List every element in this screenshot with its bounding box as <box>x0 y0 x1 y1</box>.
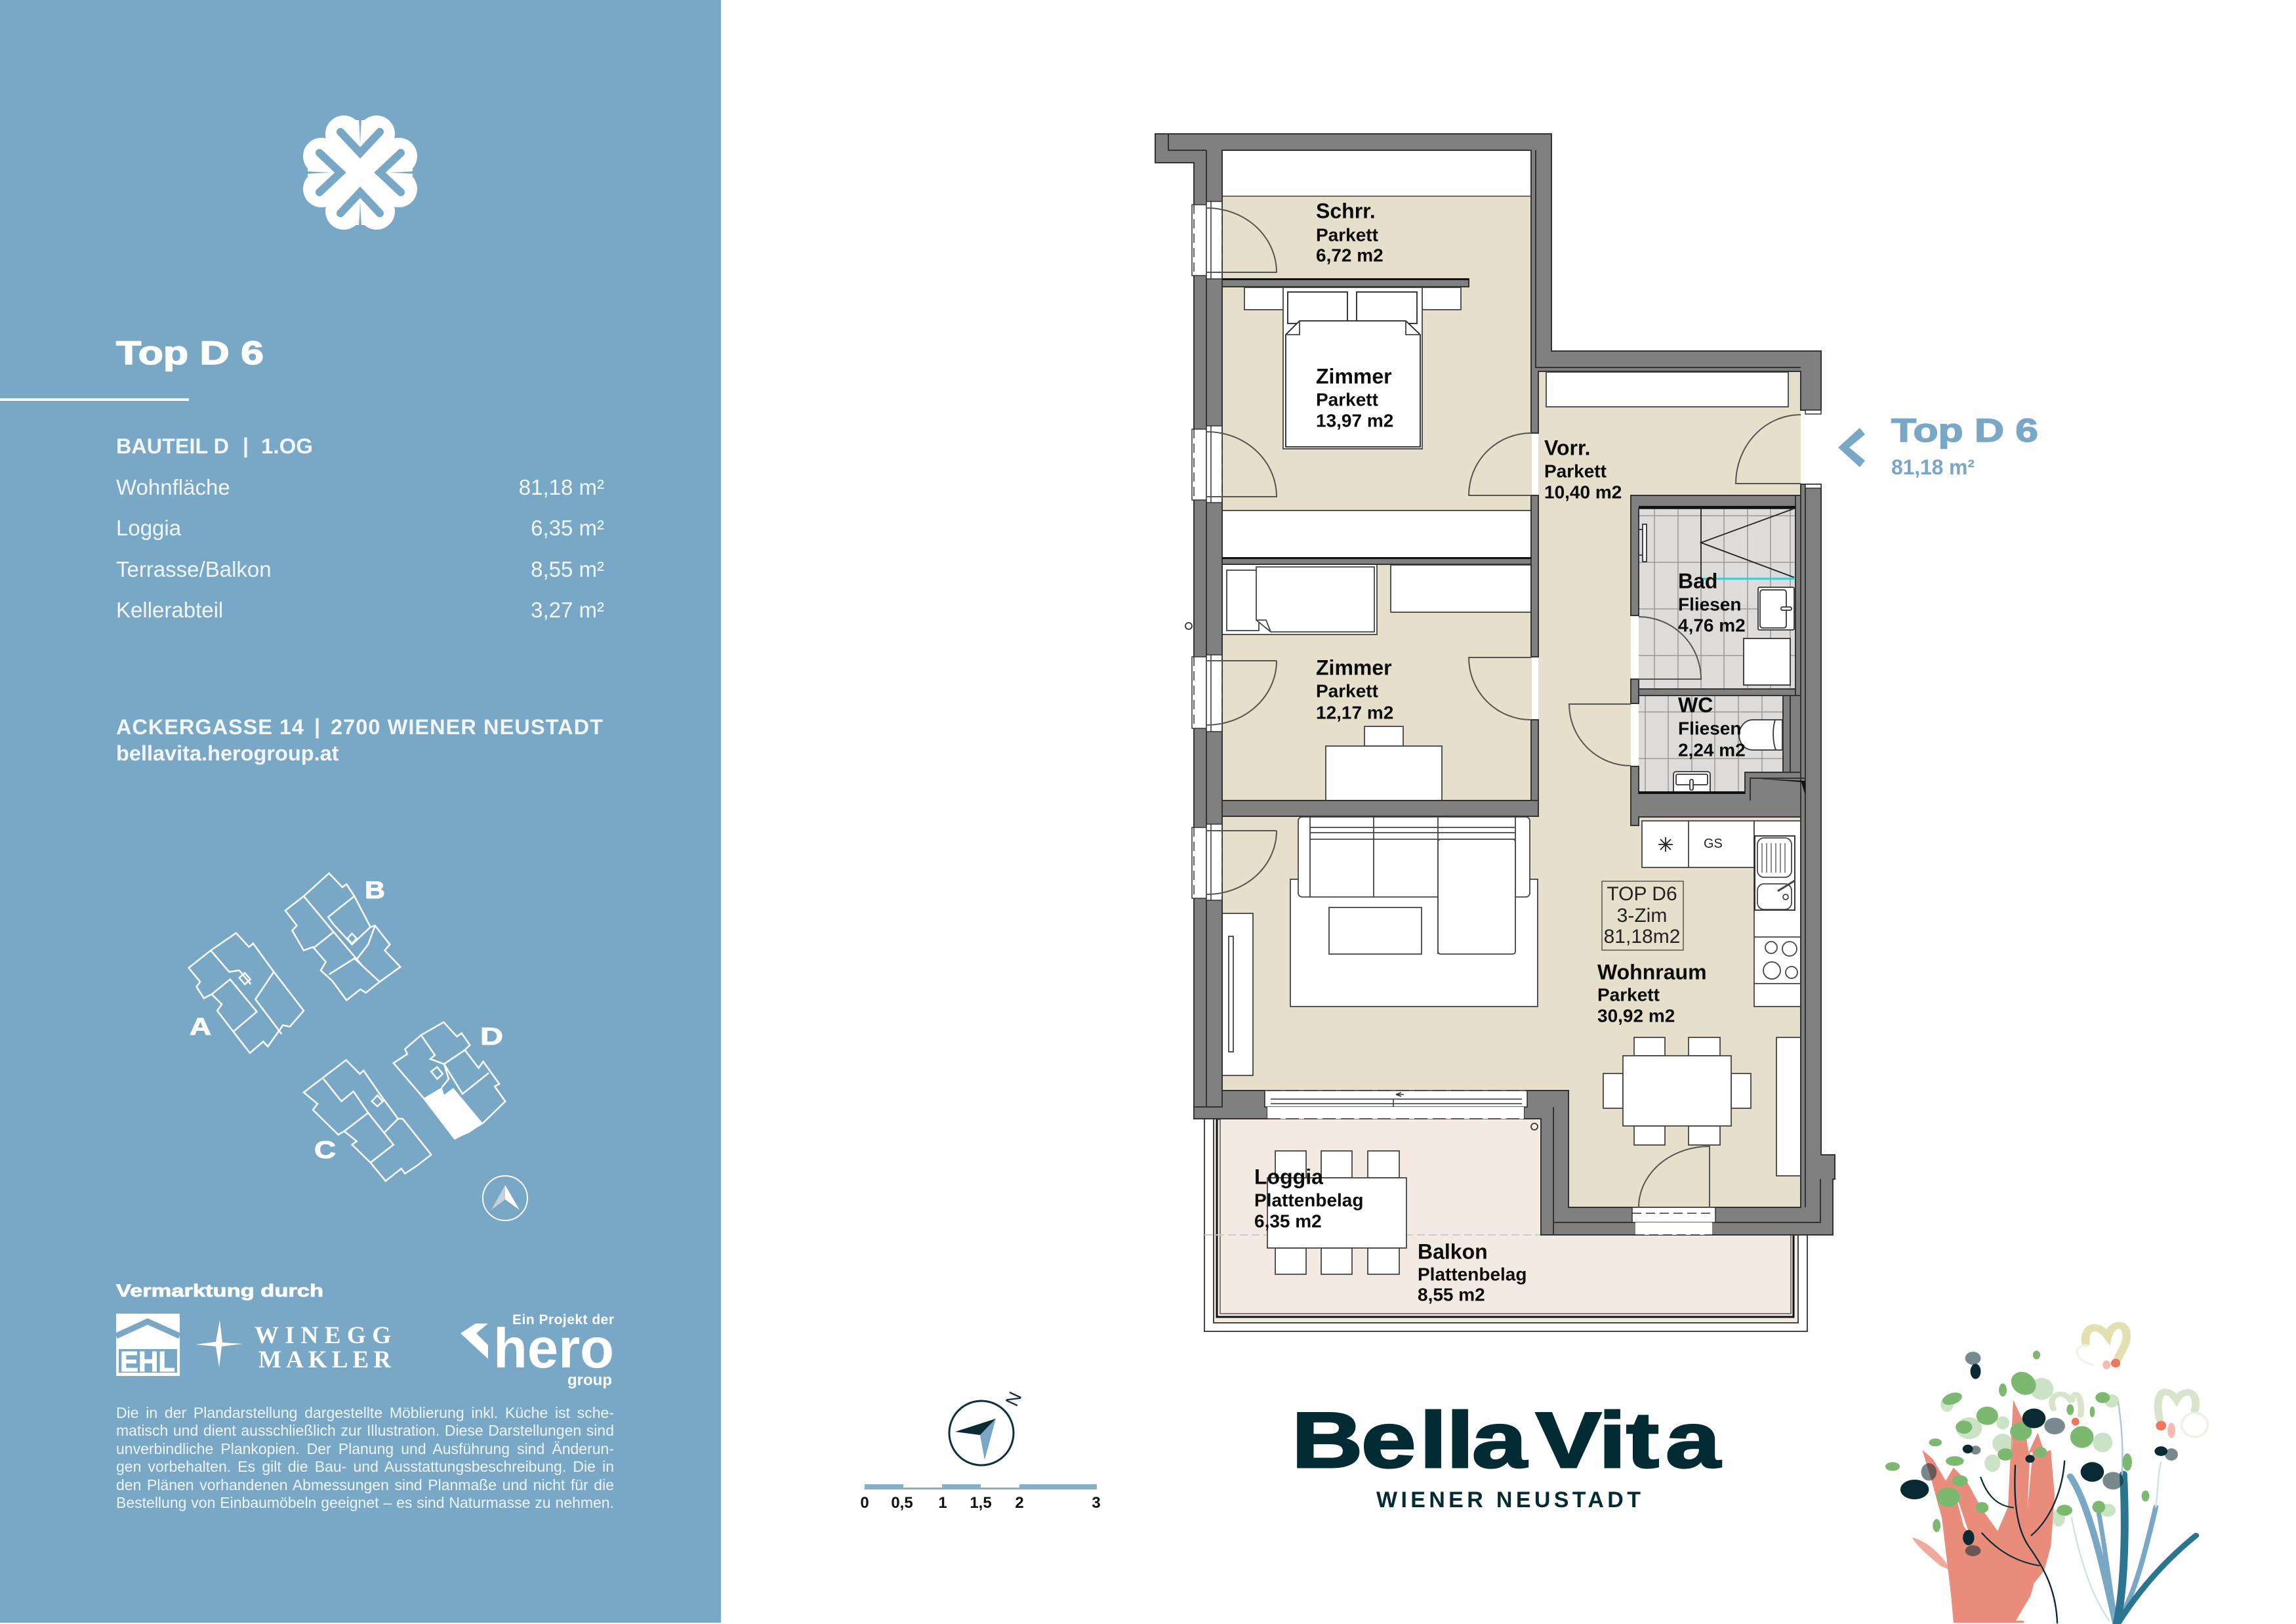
room labels: Balkon <box>1418 1240 1488 1264</box>
room labels: 8,55 m2 <box>1418 1285 1485 1304</box>
windows and doors in walls <box>1192 201 1821 1235</box>
text block: disclaimer: Die in der Plandarstellung dargestellte Möblierung inkl. Küche ist sche- <box>116 1404 614 1421</box>
room labels: 2,24 m2 <box>1678 740 1746 760</box>
room labels: Parkett <box>1316 681 1378 701</box>
icon: hood asterisk <box>1658 837 1673 852</box>
text: Wiener Neustadt: WIENER NEUSTADT <box>1376 1488 1641 1512</box>
building letters: D <box>480 1023 503 1050</box>
room labels: 6,35 m2 <box>1254 1211 1322 1231</box>
furniture: living room and kitchen <box>1222 817 1801 1274</box>
icon: site compass <box>483 1176 527 1220</box>
logo: Winegg Makler: MAKLER <box>258 1346 392 1373</box>
label: GS: GS <box>1704 837 1723 851</box>
text block: area table: | <box>243 434 249 457</box>
text block: disclaimer: unverbindliche Plankopien. Der Planung und Ausführung sind Änderun- <box>116 1440 614 1457</box>
text block: address <box>116 715 603 765</box>
room labels: Loggia <box>1254 1165 1323 1189</box>
heading: Vermarktung durch: Vermarktung durch <box>116 1281 323 1301</box>
callout: Top D 6: 81,18 m² <box>1891 455 1975 479</box>
label box: TOP D6: 81,18m2 <box>1604 926 1680 947</box>
heavy wall edges <box>1222 278 1805 795</box>
chart: scale bar: 0,5 <box>891 1494 913 1512</box>
logo: hero group <box>461 1312 614 1389</box>
text block: area table: 8,55 m² <box>531 557 604 581</box>
chart: scale bar <box>860 1484 1101 1512</box>
chart: scale bar: 1 <box>938 1494 947 1512</box>
room labels: 4,76 m2 <box>1678 615 1746 635</box>
logo: Bella Vita: BellaVita <box>1292 1396 1721 1484</box>
arrow: entrance marker <box>1838 428 1865 467</box>
walls <box>1155 134 1835 1235</box>
callout: Top D 6 <box>1891 412 2038 479</box>
text block: area table: 3,27 m² <box>531 598 604 622</box>
room labels: Zimmer <box>1316 656 1392 680</box>
building letters: B <box>365 877 385 904</box>
heading: Top D 6: Top D 6 <box>116 335 264 371</box>
label box: TOP D6 <box>1602 881 1683 950</box>
building letters <box>190 877 503 1163</box>
text block: area table: BAUTEIL D <box>116 434 229 458</box>
room labels: Plattenbelag <box>1254 1190 1363 1210</box>
logo: Winegg Makler <box>195 1320 392 1373</box>
text block: disclaimer: matisch und dient ausschließlich zur Illustration. Diese Darstellungen sind <box>116 1422 614 1439</box>
text block: disclaimer: Bestellung von Einbaumöbeln geeignet – es sind Naturmasse zu nehmen. <box>116 1494 614 1511</box>
room labels: Vorr. <box>1544 436 1591 459</box>
room labels: 30,92 m2 <box>1597 1005 1675 1026</box>
icons: downpipes <box>1185 623 1538 1130</box>
balcony and loggia floor <box>1204 1119 1807 1331</box>
room labels: Parkett <box>1597 984 1660 1005</box>
chart: scale bar: 0 <box>860 1494 869 1512</box>
room labels: 12,17 m2 <box>1316 702 1393 723</box>
panel: left sidebar <box>0 0 721 1623</box>
text block: area table: 6,35 m² <box>531 516 604 540</box>
text block: area table: Terrasse/Balkon <box>116 557 272 581</box>
bathroom fixtures <box>1639 509 1794 793</box>
text block: address: ACKERGASSE 14 <box>116 715 304 739</box>
room labels: Parkett <box>1544 461 1607 482</box>
illustration: hand and plants <box>1885 1325 2207 1623</box>
text block: area table <box>116 434 604 622</box>
room labels: Zimmer <box>1316 365 1392 388</box>
chart: scale bar: 3 <box>1092 1494 1101 1512</box>
logo: EHL <box>116 1314 180 1378</box>
room labels: Fliesen <box>1678 594 1741 614</box>
text block: area table: 81,18 m² <box>519 475 604 499</box>
door swings <box>1207 208 1801 1207</box>
logo: Winegg Makler: WINEGG <box>255 1322 391 1349</box>
room labels: 6,72 m2 <box>1316 245 1384 265</box>
panel: floor plan <box>1155 134 1835 1331</box>
building letters: C <box>314 1136 336 1163</box>
text block: disclaimer: den Plänen vorhandenen Abmessungen sind Planmaße und nicht für die <box>116 1476 614 1493</box>
chart: scale bar: 1,5 <box>970 1494 992 1512</box>
divider under heading <box>0 398 189 401</box>
text block: address: | <box>314 715 320 738</box>
logo: hero group: group <box>567 1371 612 1389</box>
logo: hero group: hero <box>493 1318 614 1380</box>
site map: building outlines <box>189 873 505 1181</box>
room labels <box>1254 199 1746 1304</box>
logo: EHL: EHL <box>120 1346 175 1378</box>
bathroom and WC tiles <box>1639 509 1795 793</box>
text block: disclaimer: gen vorbehalten. Es gilt die Bau- und Ausstattungsbeschreibung. Die in <box>116 1458 614 1475</box>
room labels: Plattenbelag <box>1418 1264 1527 1285</box>
text block: area table: Wohnfläche <box>116 475 230 499</box>
text block: area table: Loggia <box>116 516 182 540</box>
icon: north compass <box>949 1388 1025 1465</box>
room labels: Parkett <box>1316 390 1378 409</box>
icon: north compass: N <box>1002 1388 1025 1409</box>
callout: Top D 6: Top D 6 <box>1891 412 2038 449</box>
room floors <box>1222 196 1801 1207</box>
room labels: Parkett <box>1316 224 1378 245</box>
room labels: 10,40 m2 <box>1544 482 1622 503</box>
text block: disclaimer <box>116 1404 614 1511</box>
icon: clover logo <box>302 115 418 230</box>
text block: address: bellavita.herogroup.at <box>116 741 339 765</box>
text block: area table: 1.OG <box>261 434 313 458</box>
building letters: A <box>190 1013 211 1040</box>
room labels: WC <box>1678 693 1713 717</box>
room labels: Wohnraum <box>1597 961 1707 984</box>
chart: scale bar: 2 <box>1015 1494 1024 1512</box>
room labels: Fliesen <box>1678 718 1741 739</box>
text block: address: 2700 WIENER NEUSTADT <box>331 715 603 739</box>
text block: area table: Kellerabteil <box>116 598 223 622</box>
label box: TOP D6: 3-Zim <box>1617 905 1667 927</box>
room labels: 13,97 m2 <box>1316 411 1393 430</box>
room labels: Bad <box>1678 570 1717 593</box>
furniture: closets and bedrooms <box>1222 196 1788 801</box>
room labels: Schrr. <box>1316 199 1376 223</box>
logo: hero group: Ein Projekt der <box>512 1312 614 1327</box>
label box: TOP D6: TOP D6 <box>1607 883 1677 905</box>
